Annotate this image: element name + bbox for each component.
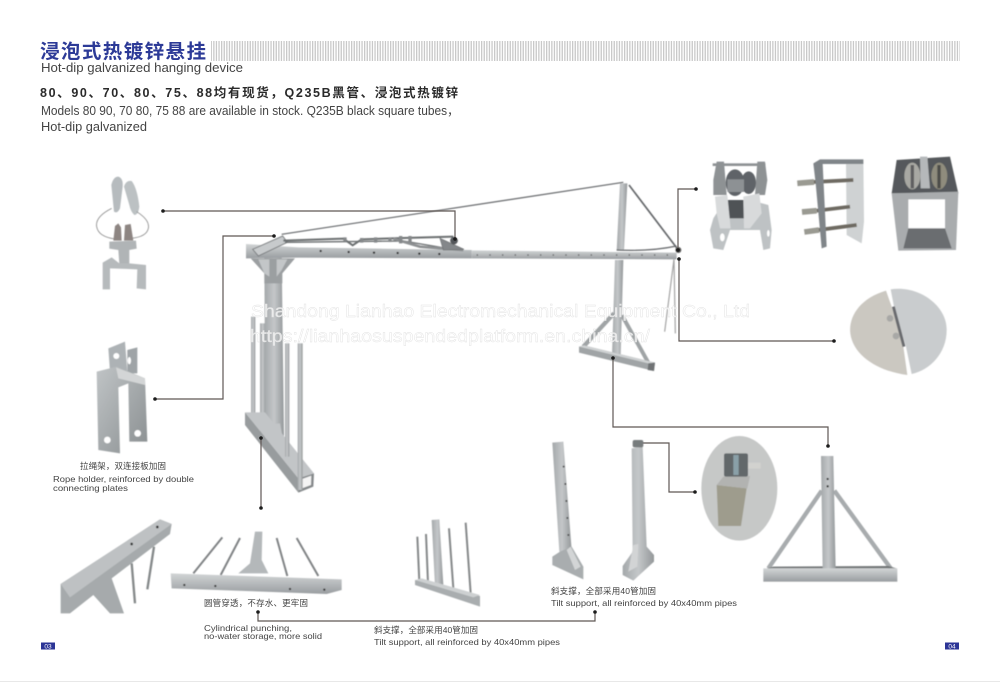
counterweight base bbox=[245, 343, 314, 493]
title: 浸泡式热镀锌悬挂 bbox=[40, 41, 206, 63]
page number 04 bbox=[945, 642, 959, 650]
subtitle: Hot-dip galvanized hanging device bbox=[41, 61, 243, 75]
main suspension frame bbox=[245, 182, 681, 493]
connector lines bbox=[153, 187, 836, 621]
icon: tilt post side bbox=[552, 442, 583, 579]
front base bbox=[579, 345, 655, 371]
icon: rope clip assembly bbox=[97, 177, 149, 289]
icon: circular end plate bbox=[850, 289, 947, 375]
watermark: https://lianhaosuspendedplatform.en.china.cn/ bbox=[250, 326, 650, 346]
icon: U bolt bracket bbox=[797, 159, 864, 248]
caption: cylindrical punching bbox=[204, 598, 322, 641]
icon: beam corner detail bbox=[61, 519, 172, 613]
title hatch band bbox=[211, 41, 960, 61]
caption: tilt support right: Tilt support, all reinforced by 40x40mm pipes bbox=[551, 598, 737, 608]
icon: drilled base with rods bbox=[171, 532, 342, 594]
icon: pulley bracket bbox=[710, 162, 772, 250]
caption: rope holder: connecting plates bbox=[53, 483, 128, 493]
models description: Models 80 90, 70 80, 75 88 are available in stock. Q235B black square tubes， bbox=[41, 104, 459, 118]
column bbox=[264, 257, 284, 447]
page number 03: 03 bbox=[44, 644, 52, 650]
watermark bbox=[250, 301, 750, 346]
lower mast bbox=[612, 260, 623, 357]
caption: tilt support bottom bbox=[374, 625, 560, 647]
page number 04: 04 bbox=[948, 644, 956, 650]
models heading: 80、90、70、80、75、88均有现货，Q235B黑管、浸泡式热镀锌 bbox=[40, 85, 458, 100]
front braces bbox=[583, 313, 648, 363]
upper mast bbox=[617, 183, 627, 251]
icon: square pulley block bbox=[892, 157, 958, 251]
caption: tilt support bottom: Tilt support, all reinforced by 40x40mm pipes bbox=[374, 637, 560, 647]
caption: cylindrical punching: Cylindrical punching, bbox=[204, 623, 292, 633]
column gusset bbox=[251, 258, 295, 283]
upper beam bbox=[246, 244, 472, 258]
caption: rope holder: 拉绳架，双连接板加固 bbox=[80, 461, 166, 471]
models description: Hot-dip galvanized bbox=[41, 120, 147, 134]
icon: tilt post front bbox=[623, 440, 654, 581]
caption: rope holder: Rope holder, reinforced by double bbox=[53, 474, 194, 484]
page number 03 bbox=[41, 642, 55, 650]
icon: base with vertical rods bbox=[415, 519, 480, 607]
icon: triangular support frame bbox=[763, 456, 897, 582]
end pulley bbox=[675, 247, 681, 253]
tie rods and turnbuckles bbox=[283, 236, 464, 250]
caption: cylindrical punching: 圆管穿透，不存水、更牢固 bbox=[204, 598, 308, 608]
caption: rope holder bbox=[53, 461, 194, 493]
icon: oval pulley detail bbox=[701, 436, 777, 541]
models description bbox=[41, 104, 459, 134]
caption: tilt support right bbox=[551, 586, 737, 608]
watermark: Shandong Lianhao Electromechanical Equipment Co., Ltd bbox=[251, 301, 750, 321]
wire ropes bbox=[282, 182, 678, 333]
extension beam bbox=[472, 250, 677, 259]
caption: tilt support bottom: 斜支撑，全部采用40管加固 bbox=[374, 625, 478, 635]
caption: tilt support right: 斜支撑，全部采用40管加固 bbox=[551, 586, 656, 596]
icon: double connecting plate bbox=[97, 342, 147, 453]
rear posts bbox=[251, 317, 266, 437]
caption: cylindrical punching: no-water storage, more solid bbox=[204, 631, 322, 641]
rear lug bbox=[253, 236, 287, 256]
